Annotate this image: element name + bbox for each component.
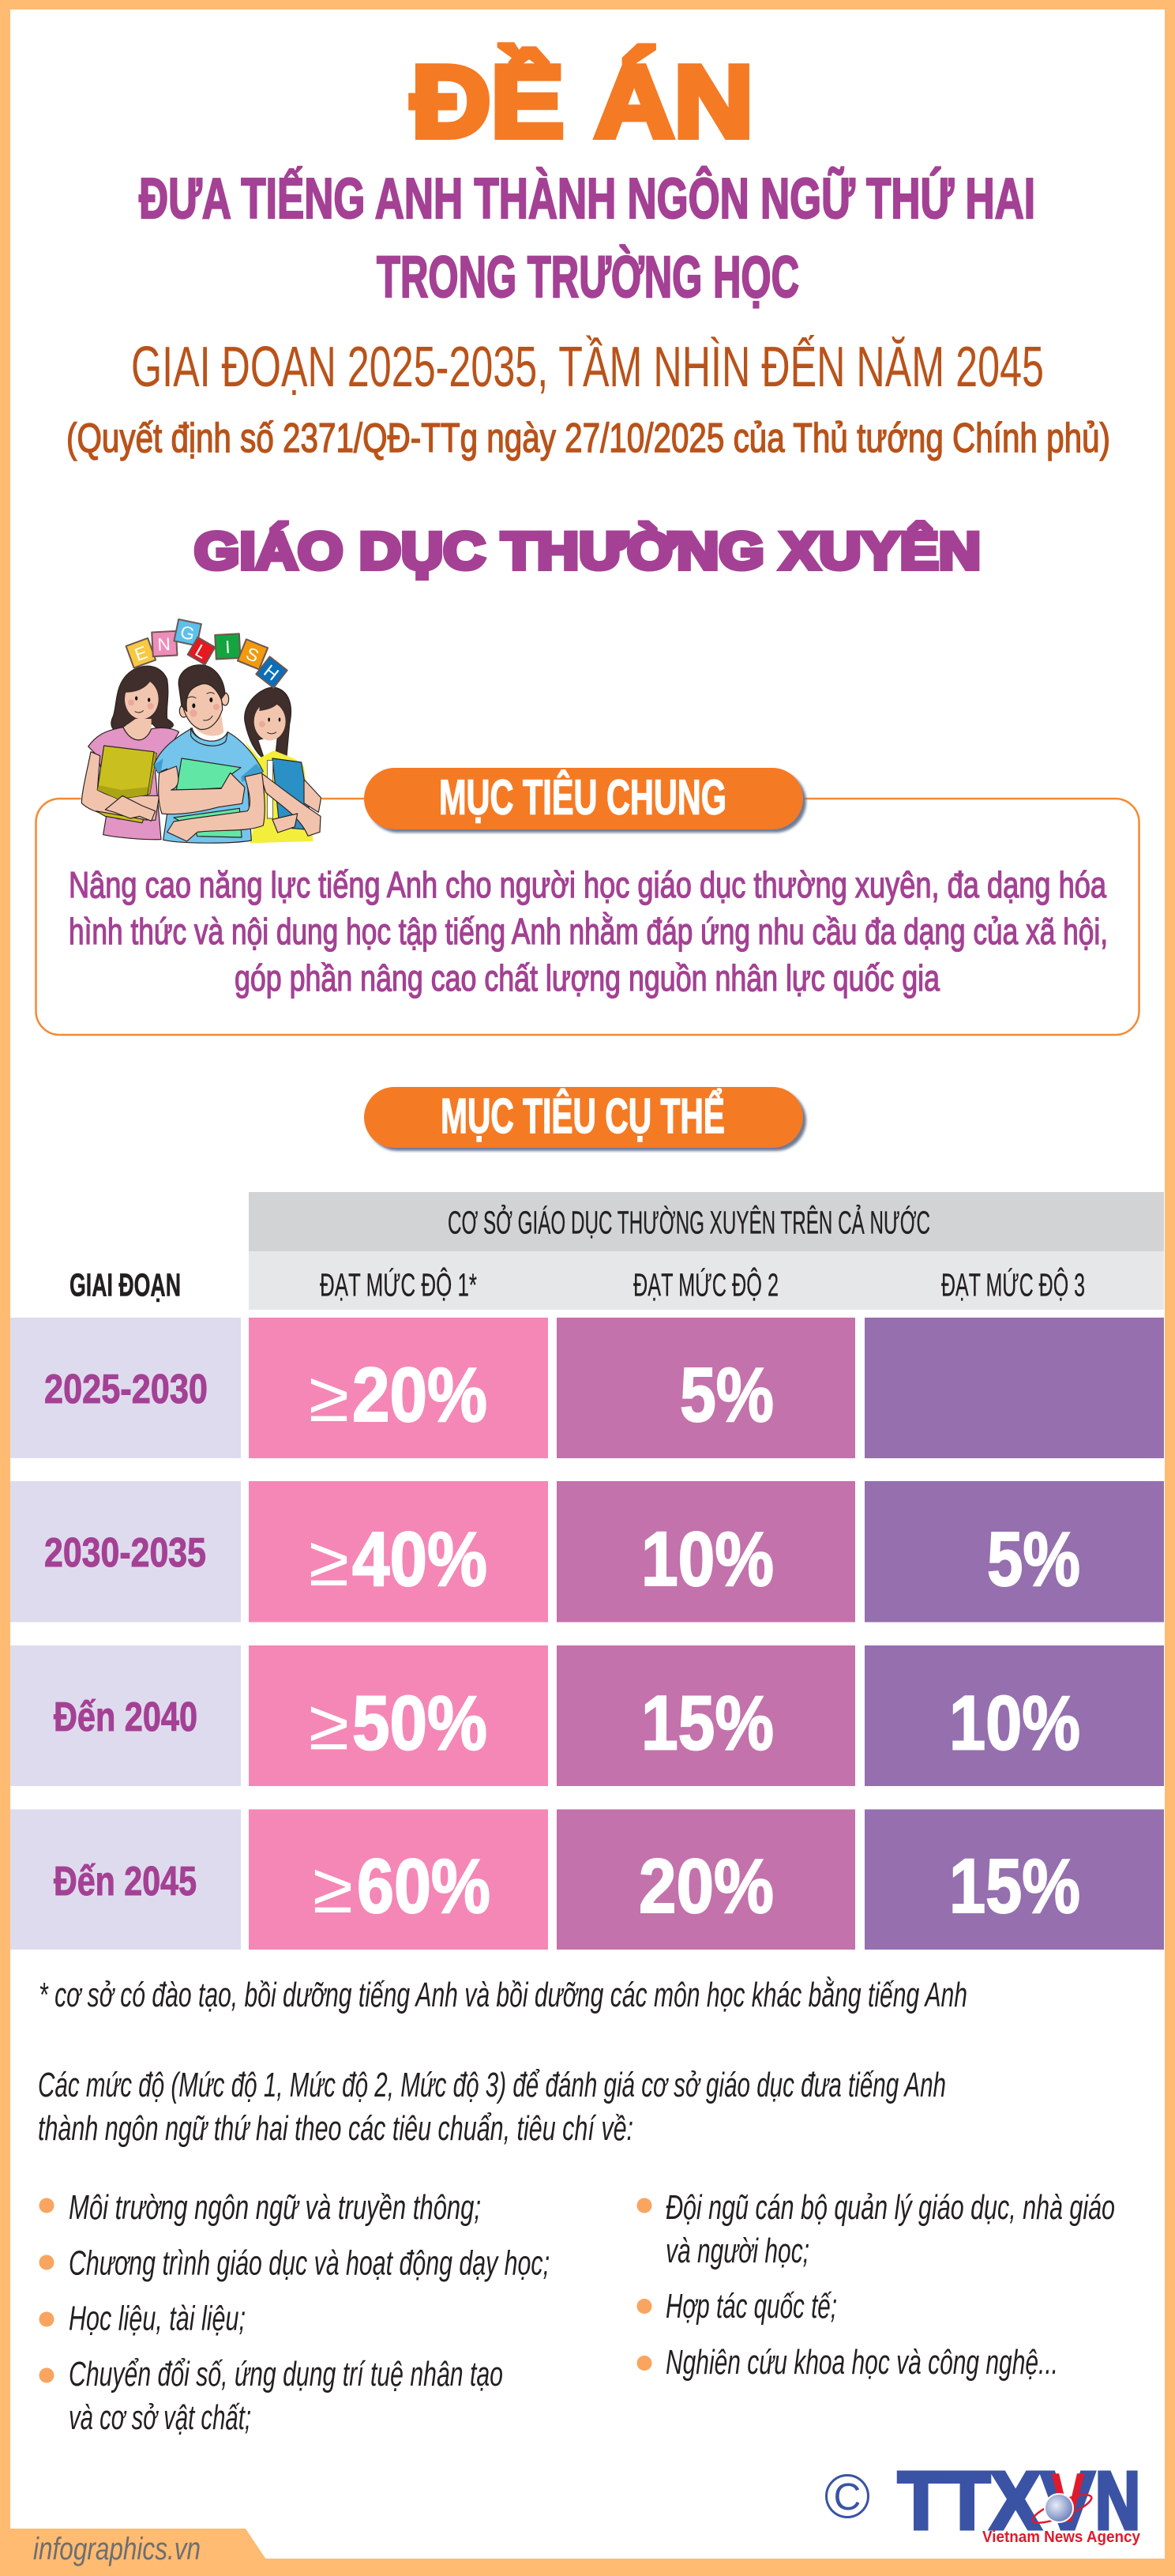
- panel outline: [36, 799, 1139, 1035]
- table row: 2030-2035: 5%: [987, 1516, 1080, 1602]
- criteria intro: [38, 2066, 946, 2148]
- list: criteria right column: [636, 2188, 1115, 2382]
- table row: 2030-2035: 2030-2035: [44, 1530, 206, 1576]
- boy: [154, 728, 263, 843]
- list: criteria left column: và cơ sở vật chất;: [69, 2398, 251, 2437]
- table header: ĐẠT MỨC ĐỘ 3: [941, 1267, 1085, 1303]
- icon: copyright: C: [834, 2476, 861, 2518]
- panel: general objective: [36, 799, 1139, 1035]
- table row: Đến 2045: Đến 2045: [54, 1859, 197, 1905]
- table row: Đến 2045: 60%: [357, 1843, 490, 1929]
- table row: Đến 2040: ≥: [309, 1686, 349, 1765]
- table row: 2030-2035: ≥: [309, 1522, 349, 1601]
- pill heading: specific objectives: MỤC TIÊU CỤ THỂ: [441, 1089, 725, 1144]
- list: criteria left column: Môi trường ngôn ngữ và truyền thông;: [69, 2188, 481, 2227]
- footer tab: infographics.vn: infographics.vn: [33, 2532, 201, 2567]
- table row: 2025-2030: [10, 1318, 1164, 1458]
- objective text: góp phần nâng cao chất lượng nguồn nhân lực quốc gia: [235, 957, 940, 998]
- table header: ĐẠT MỨC ĐỘ 1*: [320, 1267, 477, 1303]
- logo: TTXVN Vietnam News Agency: N: [1095, 2455, 1140, 2546]
- letter blocks: ENGLISH: H: [260, 660, 283, 685]
- table row: Đến 2045: [10, 1809, 1164, 1950]
- right girl: [245, 687, 291, 760]
- list: criteria left column: Chuyển đổi số, ứng dụng trí tuệ nhân tạo: [69, 2355, 503, 2394]
- table row: 2025-2030: 2025-2030: [44, 1367, 208, 1412]
- illustration: three students with English blocks: [81, 619, 322, 843]
- table row: Đến 2040: 50%: [352, 1679, 487, 1766]
- logo: TTXVN Vietnam News Agency: TTX: [898, 2455, 1041, 2546]
- criteria intro: thành ngôn ngữ thứ hai theo các tiêu chuẩn, tiêu chí về:: [38, 2109, 633, 2148]
- pill heading: specific objectives: [364, 1087, 806, 1151]
- letter blocks: ENGLISH: I: [225, 637, 231, 657]
- letter blocks: ENGLISH: S: [243, 643, 262, 667]
- table row: Đến 2045: 15%: [949, 1843, 1080, 1929]
- left girl: [111, 666, 173, 732]
- table header: ĐẠT MỨC ĐỘ 2: [633, 1267, 779, 1303]
- letter blocks: ENGLISH: [126, 619, 287, 688]
- logo: TTXVN Vietnam News Agency: [898, 2455, 1141, 2546]
- heading: main subject: TRONG TRƯỜNG HỌC: [377, 244, 799, 310]
- letter blocks: ENGLISH: E: [132, 641, 150, 665]
- pill heading: general objective: [364, 768, 806, 833]
- table header: GIAI ĐOẠN: [69, 1267, 181, 1303]
- table row: Đến 2040: 10%: [949, 1679, 1080, 1766]
- objective text: [69, 864, 1108, 998]
- letter blocks: ENGLISH: G: [178, 621, 197, 645]
- list: criteria right column: và người học;: [666, 2232, 809, 2270]
- table row: Đến 2045: 20%: [639, 1843, 774, 1929]
- list: criteria left column: [39, 2188, 550, 2437]
- table row: 2030-2035: 10%: [641, 1516, 774, 1602]
- list: criteria left column: Chương trình giáo dục và hoạt động dạy học;: [69, 2243, 550, 2283]
- letter blocks: ENGLISH: N: [157, 634, 171, 655]
- heading: continuing education: GIÁO DỤC THƯỜNG XUYÊN: [194, 521, 981, 580]
- table row: 2025-2030: ≥: [309, 1358, 349, 1437]
- table row: 2025-2030: 5%: [680, 1352, 774, 1438]
- logo: TTXVN Vietnam News Agency: V: [1041, 2455, 1094, 2546]
- logo: TTXVN Vietnam News Agency: Vietnam News Agency: [982, 2529, 1141, 2546]
- table row: 2030-2035: 40%: [352, 1516, 487, 1602]
- table row: 2030-2035: [10, 1481, 1164, 1623]
- logo: TTXVN Vietnam News Agency: V: [1051, 2458, 1085, 2537]
- table row: Đến 2045: ≥: [313, 1849, 353, 1928]
- pill heading: general objective: MỤC TIÊU CHUNG: [439, 771, 726, 825]
- table row: Đến 2040: 15%: [641, 1679, 774, 1766]
- list: criteria left column: Học liệu, tài liệu;: [69, 2299, 246, 2338]
- list: criteria right column: Hợp tác quốc tế;: [666, 2287, 837, 2326]
- title: Đề án: ĐỀ ÁN: [411, 44, 753, 159]
- table header: [69, 1192, 1164, 1310]
- table row: Đến 2040: [10, 1645, 1164, 1786]
- heading: main subject: [139, 167, 1035, 310]
- table row: 2025-2030: 20%: [352, 1352, 487, 1438]
- table row: Đến 2040: Đến 2040: [54, 1694, 197, 1740]
- letter blocks: ENGLISH: L: [192, 640, 211, 663]
- icon: copyright: [826, 2476, 869, 2518]
